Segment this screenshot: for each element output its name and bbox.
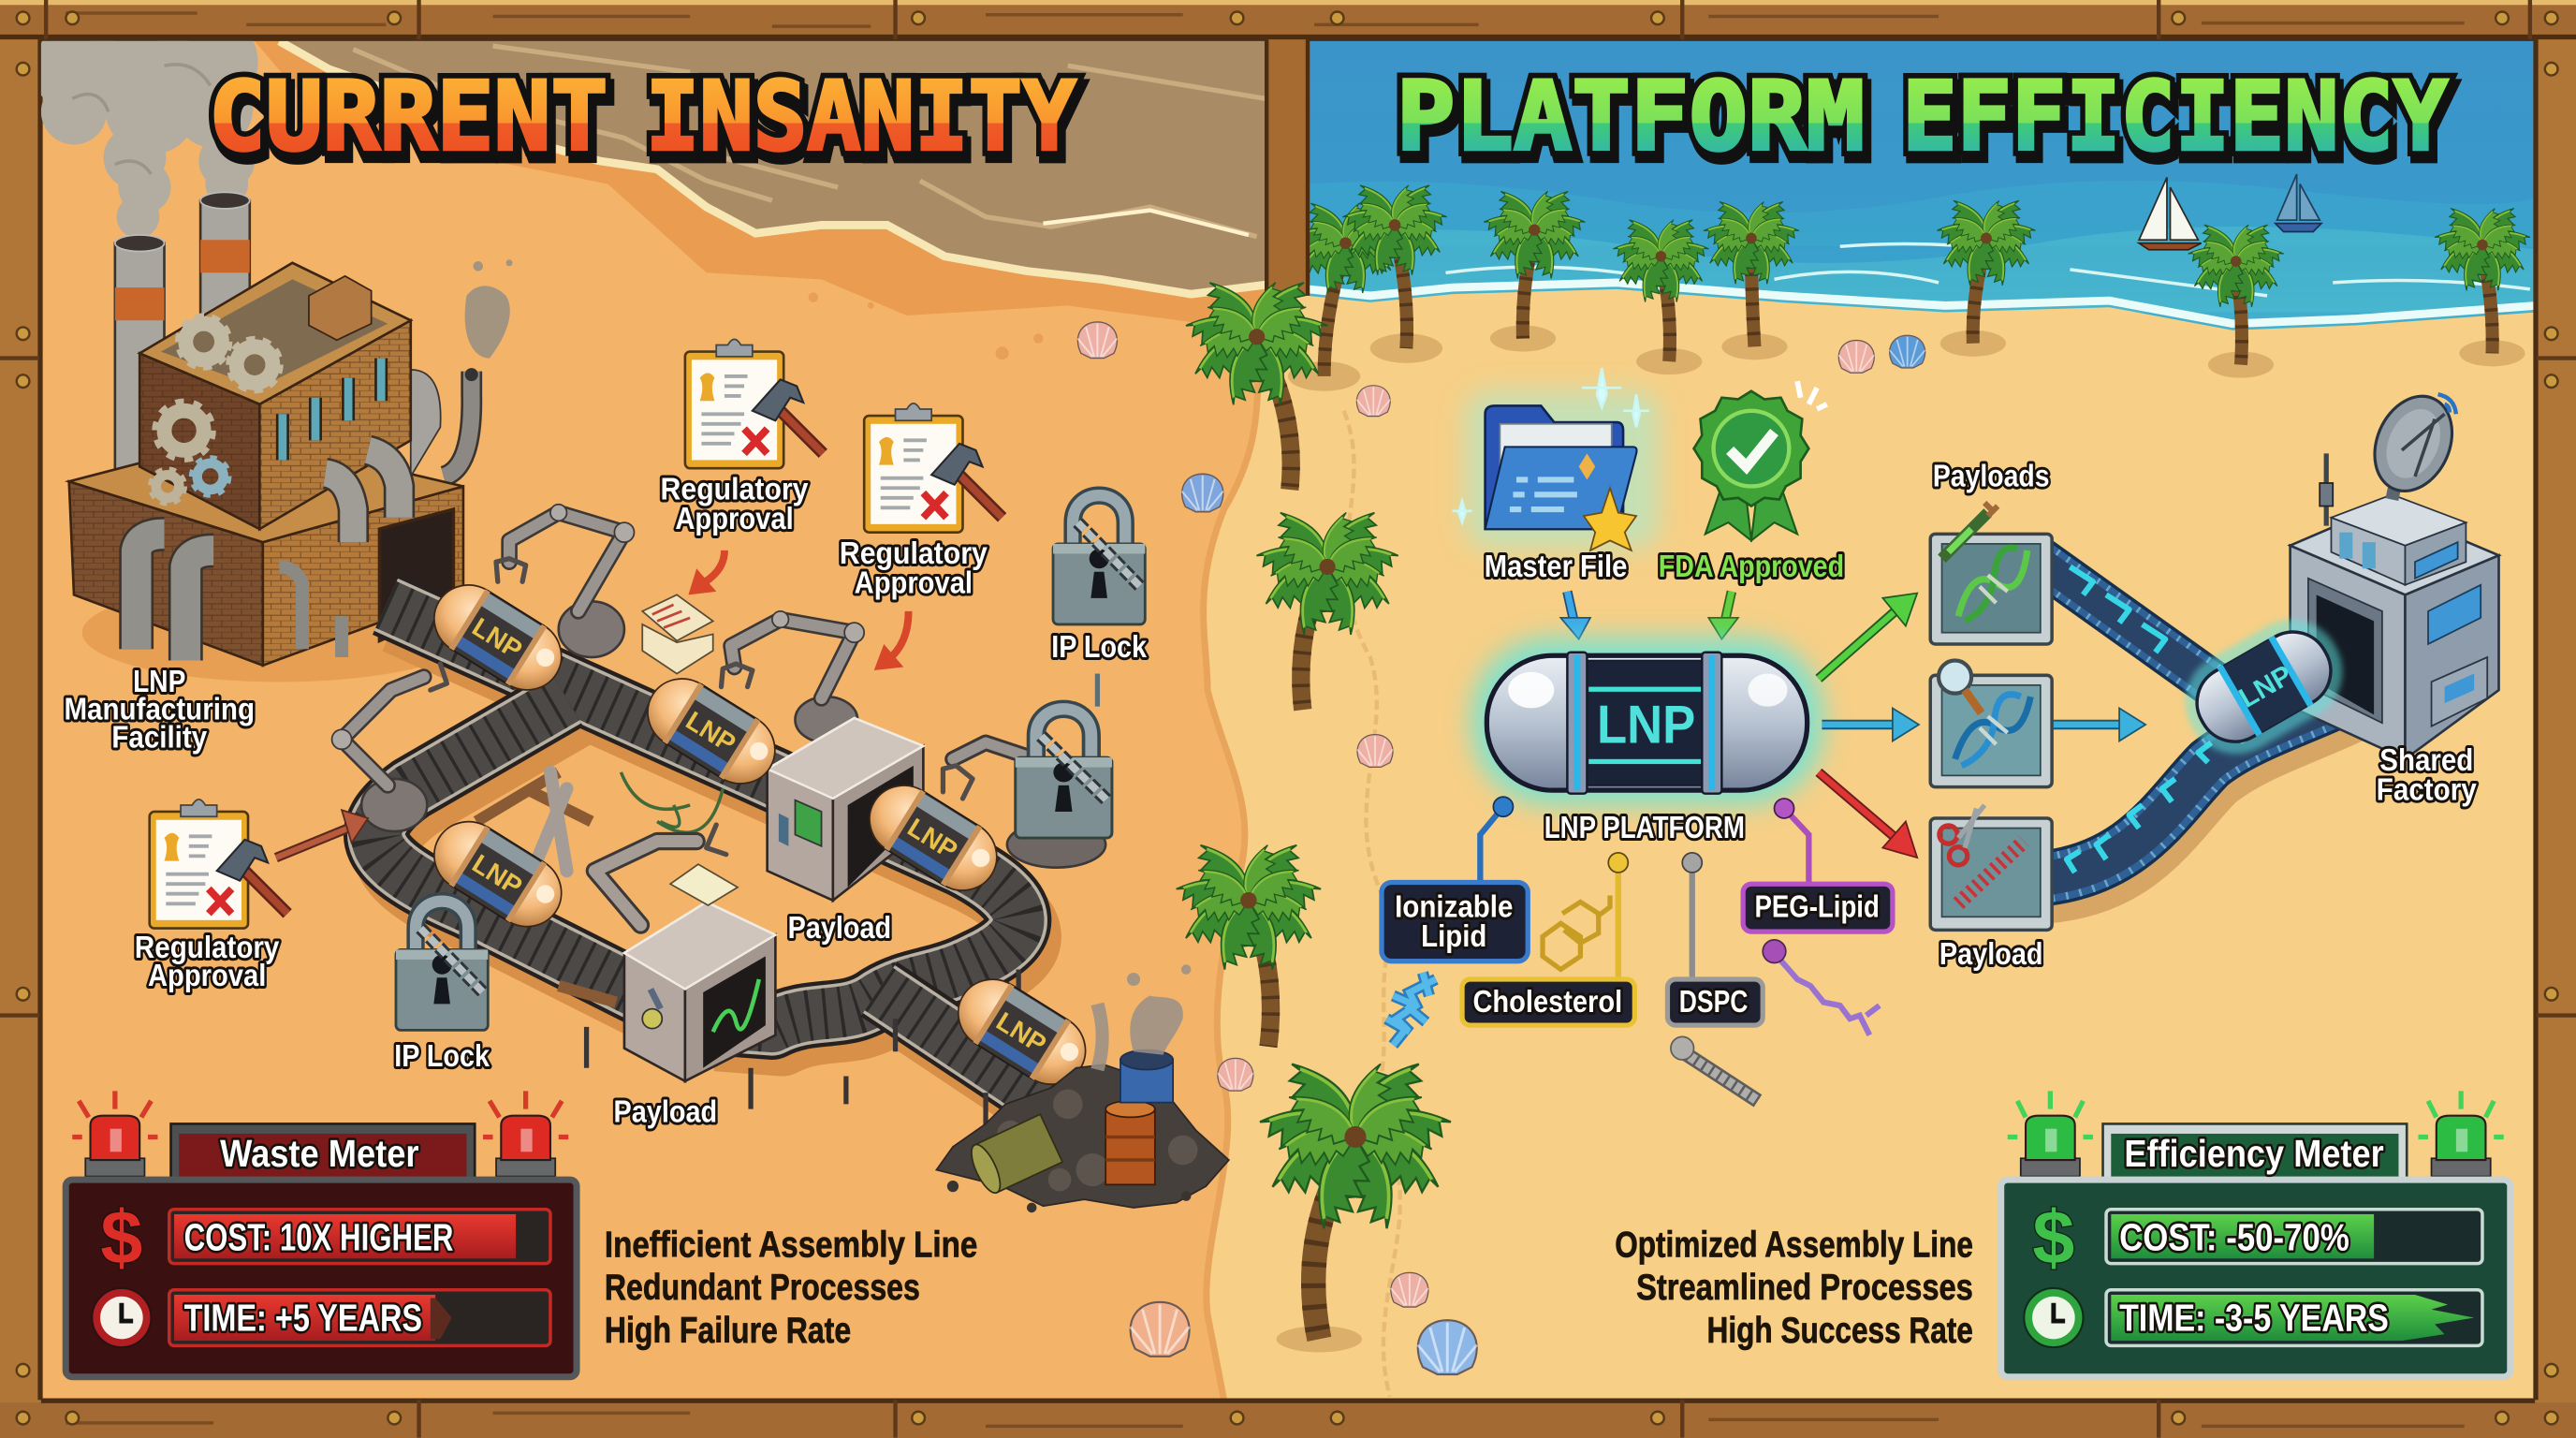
labels: left side: Manufacturing xyxy=(64,693,255,727)
molecule icons xyxy=(1386,895,1880,1101)
ip locks xyxy=(396,495,1145,1030)
component: cholesterol: Cholesterol xyxy=(1472,985,1622,1020)
left text: inefficient list: Redundant Processes xyxy=(605,1268,920,1308)
clipboard: regulatory approval 2 xyxy=(840,404,1003,601)
payload card: mrna strand xyxy=(1930,503,2052,644)
title: platform efficiency: PLATFORM xyxy=(1399,69,1868,180)
label: shared factory: Factory xyxy=(2377,773,2477,808)
component: cholesterol xyxy=(1462,979,1634,1025)
payload cards xyxy=(1930,503,2052,930)
efficiency cost bar xyxy=(2106,1210,2482,1264)
icon: master file folder xyxy=(1453,368,1660,550)
shared factory xyxy=(2291,384,2499,759)
lnp capsules on the conveyor xyxy=(421,572,1099,1097)
clipboard: regulatory approval 2: Approval xyxy=(855,566,973,601)
palms along the right shoreline xyxy=(1288,177,2533,391)
rubble heap with barrels xyxy=(936,1049,1229,1212)
clipboard: regulatory approval 3: Regulatory xyxy=(135,931,280,965)
labels: payloads: Payload xyxy=(1939,937,2042,972)
input arrows to platform xyxy=(1560,592,1738,639)
arrows from regulatory approvals xyxy=(276,550,909,858)
waste meter: Waste Meter xyxy=(220,1132,419,1175)
broken conveyor belt xyxy=(376,605,1061,1125)
title: current insanity: CURRENT xyxy=(212,69,611,180)
component leader lines xyxy=(1480,797,1808,979)
component: ionizable lipid: Ionizable xyxy=(1395,889,1513,924)
platform capsule at factory xyxy=(2167,602,2361,772)
icon: efficiency dollar: $ xyxy=(2032,1196,2074,1281)
title: current insanity: CURRENT xyxy=(209,63,607,173)
clipboard: regulatory approval 1: Regulatory xyxy=(661,473,809,507)
left text: inefficient list: High Failure Rate xyxy=(605,1311,851,1351)
labels: left side: Payload xyxy=(788,911,891,946)
component: peg-lipid xyxy=(1743,884,1893,932)
payload card: dna strand xyxy=(1930,661,2052,787)
title: current insanity: INSANITY xyxy=(646,63,1076,173)
efficiency time bar: TIME: -3-5 YEARS xyxy=(2119,1297,2389,1340)
component: dspc xyxy=(1667,979,1763,1025)
left text: inefficient list: Inefficient Assembly Line xyxy=(605,1225,977,1266)
label: lnp platform: LNP PLATFORM xyxy=(1544,811,1745,845)
labels: left side: IP Lock xyxy=(1051,630,1147,665)
sailboats xyxy=(2139,174,2321,250)
alarm beacons: efficiency xyxy=(2008,1091,2504,1177)
right text: optimized list xyxy=(1615,1225,1973,1351)
component: ionizable lipid: Lipid xyxy=(1421,919,1486,954)
platform capsule at factory: LNP xyxy=(2233,659,2298,714)
factory smoke xyxy=(41,41,513,359)
paper stacks xyxy=(642,594,738,905)
robot arms xyxy=(332,505,1105,925)
factory: lnp manufacturing facility xyxy=(69,192,478,682)
efficiency meter xyxy=(2001,1091,2510,1377)
clipboard: regulatory approval 2: Regulatory xyxy=(840,536,988,571)
center palms xyxy=(1172,271,1456,1352)
waste time bar: TIME: +5 YEARS xyxy=(184,1297,422,1340)
title: current insanity: CURRENT xyxy=(209,63,607,173)
efficiency cost bar: COST: -50-70% xyxy=(2119,1216,2349,1259)
title: platform efficiency: PLATFORM xyxy=(1397,63,1865,173)
component: dspc: DSPC xyxy=(1679,985,1748,1020)
alarm beacons: waste xyxy=(72,1091,568,1177)
payload card: cut strand xyxy=(1930,805,2052,930)
payload machines on the belt xyxy=(624,718,923,1081)
left text: inefficient list xyxy=(605,1225,977,1351)
clipboard: regulatory approval 1 xyxy=(661,339,823,536)
label: shared factory: Shared xyxy=(2379,743,2473,778)
icon: waste clock xyxy=(92,1288,151,1347)
title: platform efficiency: PLATFORM xyxy=(1397,63,1865,173)
title: current insanity: INSANITY xyxy=(649,69,1079,180)
lnp capsules on the conveyor: LNP xyxy=(467,849,527,902)
labels: master file and fda approved: Master File xyxy=(1485,550,1627,584)
right text: optimized list: Streamlined Processes xyxy=(1636,1268,1973,1308)
efficient conveyor xyxy=(2037,559,2376,899)
labels: left side: LNP xyxy=(133,665,185,699)
lnp platform capsule: LNP xyxy=(1597,695,1695,755)
right panel: tropical beach background xyxy=(1204,39,2537,1400)
labels: payloads: Payloads xyxy=(1933,459,2049,493)
waste cost bar: COST: 10X HIGHER xyxy=(184,1216,453,1259)
lnp capsules on the conveyor: LNP xyxy=(991,1006,1051,1059)
title: platform efficiency: EFFICIENCY xyxy=(1902,63,2448,173)
icon: efficiency clock xyxy=(2024,1288,2083,1347)
labels: left side: IP Lock xyxy=(394,1039,490,1074)
right text: optimized list: High Success Rate xyxy=(1707,1311,1973,1351)
lnp capsules on the conveyor: LNP xyxy=(467,612,527,665)
output arrows to payloads xyxy=(1819,594,2145,858)
title: platform efficiency: EFFICIENCY xyxy=(1906,69,2452,180)
title: current insanity xyxy=(209,63,1079,180)
clipboard: regulatory approval 3 xyxy=(135,800,287,993)
waste meter xyxy=(66,1091,577,1377)
label: shared factory xyxy=(2377,743,2477,808)
wet sand specks xyxy=(809,292,1043,360)
efficiency time bar xyxy=(2106,1290,2482,1345)
icon: fda approved badge xyxy=(1694,381,1827,540)
title: platform efficiency xyxy=(1397,63,2452,180)
title: current insanity: INSANITY xyxy=(646,63,1076,173)
waste time bar xyxy=(169,1290,550,1345)
right text: optimized list: Optimized Assembly Line xyxy=(1615,1225,1973,1266)
icon: waste dollar: $ xyxy=(100,1196,142,1281)
clipboard: regulatory approval 3: Approval xyxy=(148,959,266,993)
labels: payloads xyxy=(1933,459,2049,972)
lnp capsules on the conveyor: LNP xyxy=(902,813,962,865)
smoke above rubble xyxy=(1090,964,1191,1071)
shells on the beach xyxy=(1077,322,1925,1374)
component: ionizable lipid xyxy=(1382,882,1528,961)
labels: master file and fda approved: FDA Approved xyxy=(1659,550,1844,584)
clipboard: regulatory approval 1: Approval xyxy=(675,502,794,536)
labels: left side: Payload xyxy=(614,1095,717,1130)
lnp platform capsule xyxy=(1472,638,1823,805)
title: platform efficiency: EFFICIENCY xyxy=(1902,63,2448,173)
labels: master file and fda approved xyxy=(1485,550,1844,584)
left panel: desert beach background xyxy=(41,39,1273,1400)
component: peg-lipid: PEG-Lipid xyxy=(1754,889,1880,924)
efficiency meter: Efficiency Meter xyxy=(2124,1132,2384,1175)
lnp capsules on the conveyor: LNP xyxy=(681,706,740,758)
labels: left side: Facility xyxy=(111,721,208,756)
labels: left side xyxy=(64,630,1147,1130)
